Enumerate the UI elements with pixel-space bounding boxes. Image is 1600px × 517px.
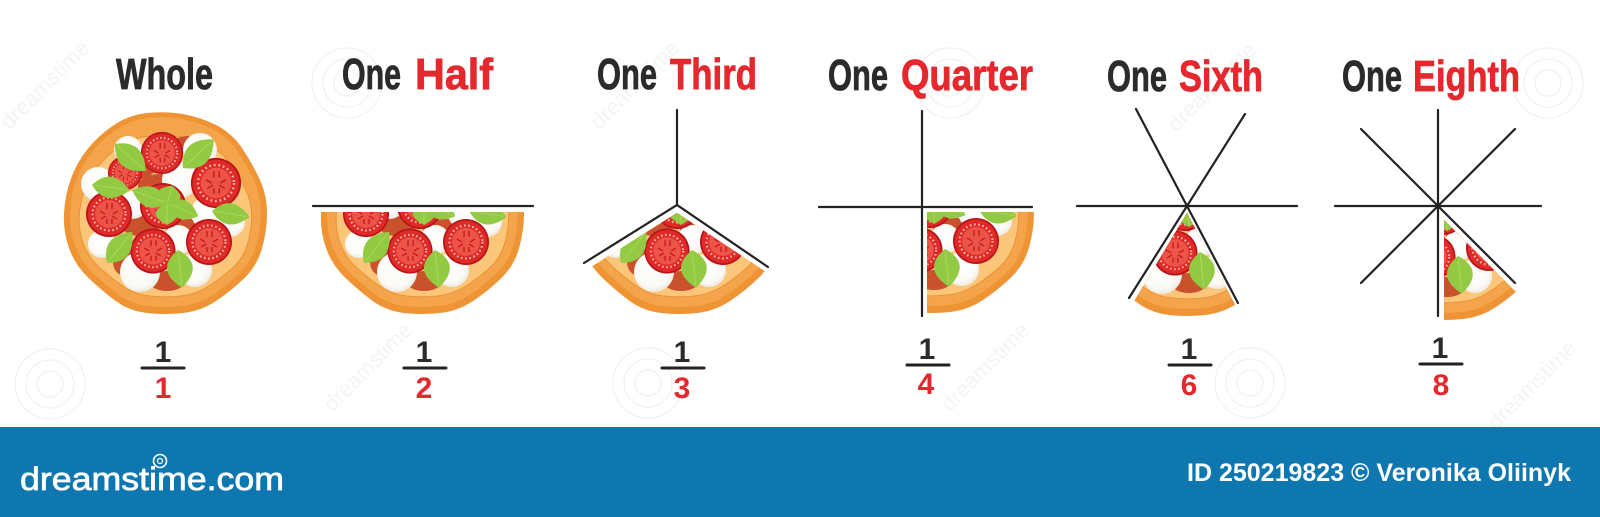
- fraction 1/2: [404, 336, 446, 405]
- panel: one eighth: [1335, 52, 1547, 402]
- cut line: [313, 205, 533, 207]
- heading: One Sixth: One: [1107, 52, 1167, 101]
- fraction 1/8: 1: [1432, 332, 1448, 365]
- fraction 1/4: 1: [919, 333, 935, 366]
- heading: One Eighth: One: [1342, 52, 1402, 101]
- logo: dreamstime.com: dreamstime.com: [20, 461, 284, 497]
- panel: one quarter: [819, 51, 1034, 401]
- watermark layer: dreamstime: [1162, 37, 1261, 136]
- fraction 1/1: 1: [155, 336, 171, 369]
- fraction 1/4: 4: [918, 368, 935, 401]
- heading: One Sixth: Sixth: [1179, 52, 1263, 101]
- whole pizza: [64, 112, 267, 314]
- heading: One Third: One: [597, 50, 657, 99]
- cut lines: [584, 110, 768, 267]
- quarter pizza slice: [927, 212, 1034, 313]
- panel: whole: [64, 50, 267, 405]
- fraction 1/4: [907, 333, 949, 401]
- heading: One Quarter: One: [828, 51, 888, 100]
- image credit: ID 250219823 © Veronika Oliinyk: [1187, 459, 1571, 487]
- fraction 1/2: 1: [416, 336, 432, 369]
- third pizza slice: [592, 213, 765, 314]
- watermark layer: [0, 35, 1583, 434]
- footer band: [0, 427, 1600, 517]
- heading: One Third: Third: [670, 50, 757, 99]
- fraction 1/6: 1: [1181, 333, 1197, 366]
- heading: One Quarter: Quarter: [901, 51, 1033, 100]
- fraction 1/3: 1: [674, 336, 690, 369]
- heading: One Third: [597, 50, 757, 99]
- heading: One Half: One: [342, 50, 401, 99]
- heading: One Eighth: [1342, 52, 1520, 101]
- eighth pizza slice: [1444, 220, 1516, 320]
- panel: one sixth: [1077, 52, 1297, 402]
- fraction 1/3: 3: [674, 372, 690, 405]
- heading: One Eighth: Eighth: [1413, 52, 1520, 101]
- heading: One Sixth: [1107, 52, 1263, 101]
- watermark layer: dreamstime: [1482, 335, 1581, 434]
- heading: Whole: Whole: [116, 50, 213, 99]
- watermark layer: dreamstime: [318, 317, 417, 416]
- fraction 1/6: [1169, 333, 1211, 402]
- cut lines: [819, 111, 1032, 316]
- fraction 1/8: [1420, 332, 1462, 402]
- half pizza: [320, 212, 524, 314]
- panel: one half: [313, 50, 533, 405]
- watermark layer: dreamstime: [585, 35, 684, 134]
- fraction 1/2: 2: [416, 372, 432, 405]
- sixth pizza slice: [1134, 213, 1236, 316]
- fraction 1/3: [662, 336, 704, 405]
- panel: one third: [582, 57, 770, 398]
- heading: One Half: [342, 50, 493, 99]
- cut lines: [1077, 109, 1297, 303]
- cut lines: [1335, 110, 1541, 316]
- fraction 1/8: 8: [1433, 369, 1449, 402]
- watermark layer: dreamstime: [935, 317, 1034, 416]
- fraction 1/1: 1: [155, 372, 171, 405]
- heading: One Half: Half: [415, 50, 493, 99]
- heading: One Quarter: [828, 51, 1033, 100]
- fraction 1/6: 6: [1181, 369, 1197, 402]
- fraction 1/1: [142, 336, 184, 405]
